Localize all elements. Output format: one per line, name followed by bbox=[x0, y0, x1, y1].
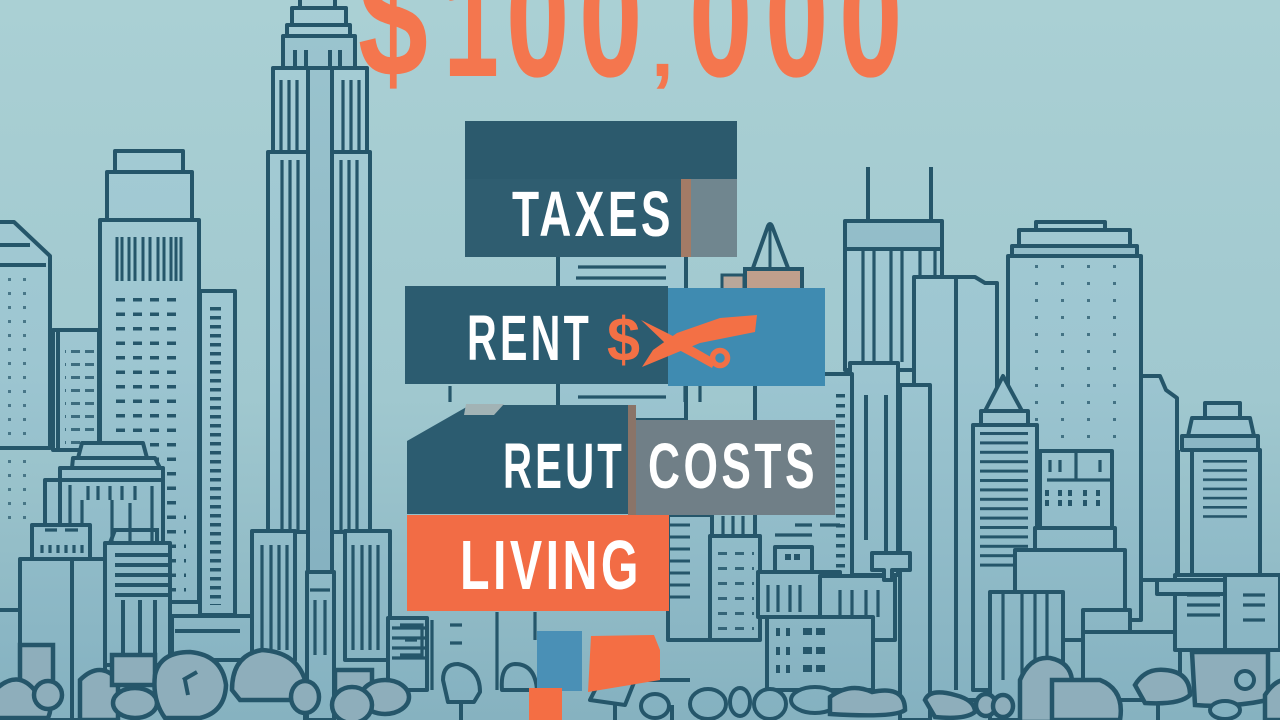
label: costs: COSTS bbox=[648, 430, 818, 502]
trees and bushes row bbox=[0, 645, 1280, 720]
icon: dollar sign and scissors bbox=[607, 306, 757, 375]
label: reut: REUT bbox=[503, 430, 625, 502]
label: taxes: TAXES bbox=[512, 178, 674, 250]
panel: costs bbox=[628, 405, 835, 515]
headline amount: , bbox=[651, 3, 674, 94]
headline amount bbox=[358, 0, 902, 128]
icon: dollar sign and scissors: $ bbox=[607, 306, 640, 375]
label: living: LIVING bbox=[460, 526, 642, 604]
panel: living bbox=[407, 515, 669, 611]
left skyline buildings bbox=[0, 151, 252, 720]
small colour blocks bbox=[529, 631, 660, 720]
central tall tower bbox=[252, 0, 427, 720]
shopping bag icon bbox=[722, 224, 802, 293]
middle background buildings bbox=[400, 250, 910, 690]
label: rent: RENT bbox=[467, 302, 592, 374]
right skyline buildings bbox=[845, 167, 1280, 720]
panel: rent bbox=[405, 286, 825, 386]
panel: taxes bbox=[465, 121, 737, 257]
panel: reut bbox=[407, 404, 628, 514]
